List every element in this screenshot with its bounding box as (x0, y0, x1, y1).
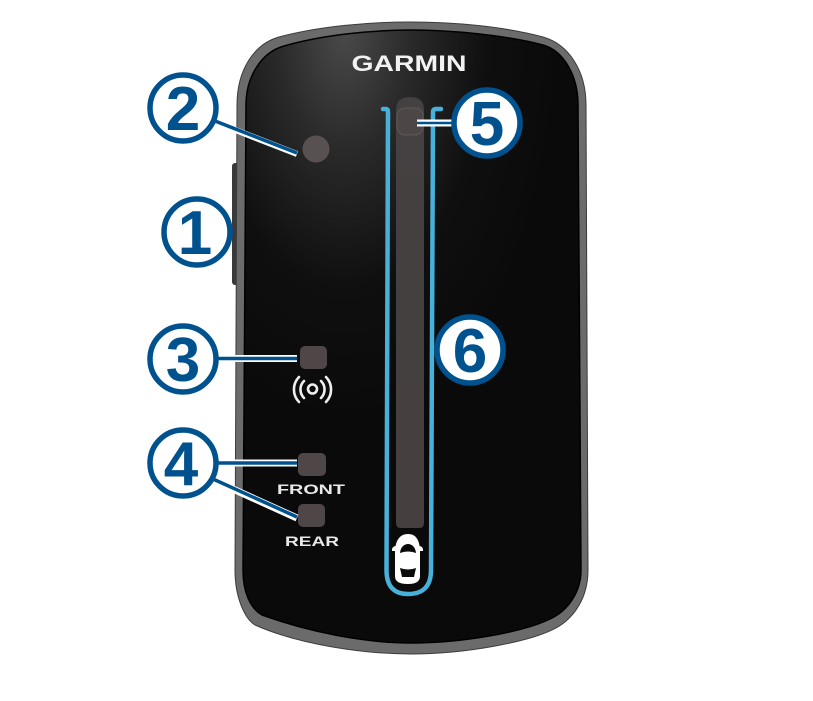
callout 4: 4 (164, 430, 199, 499)
callout 6 (437, 317, 503, 386)
callout 6: 6 (453, 317, 487, 386)
logo: GARMIN: GARMIN (352, 51, 466, 76)
rear LED (298, 504, 325, 527)
leader lines 4 (213, 463, 297, 518)
callout 2 (150, 75, 216, 144)
callout 1 (164, 199, 230, 268)
icon: wireless signal (294, 377, 331, 402)
callout 5: 5 (470, 90, 504, 159)
callout 3: 3 (166, 326, 200, 395)
device body (232, 22, 588, 654)
radar track (396, 97, 424, 528)
status LED (300, 346, 327, 369)
callout 2: 2 (166, 75, 200, 144)
icon: car (392, 534, 423, 584)
screen (243, 30, 581, 643)
light sensor dot (302, 136, 330, 162)
label: FRONT: FRONT (277, 481, 346, 497)
side button (232, 163, 240, 285)
leader line 2 (215, 122, 297, 154)
callout 1: 1 (178, 199, 212, 268)
front LED (298, 453, 326, 476)
leader line 3 (216, 355, 297, 362)
callout 3 (150, 326, 216, 395)
radar outline (383, 109, 441, 594)
callout 5 (454, 90, 520, 159)
leader line 5 (417, 120, 455, 126)
vehicle marker (397, 108, 423, 135)
callout 4 (150, 430, 216, 499)
label: REAR: REAR (285, 533, 339, 549)
